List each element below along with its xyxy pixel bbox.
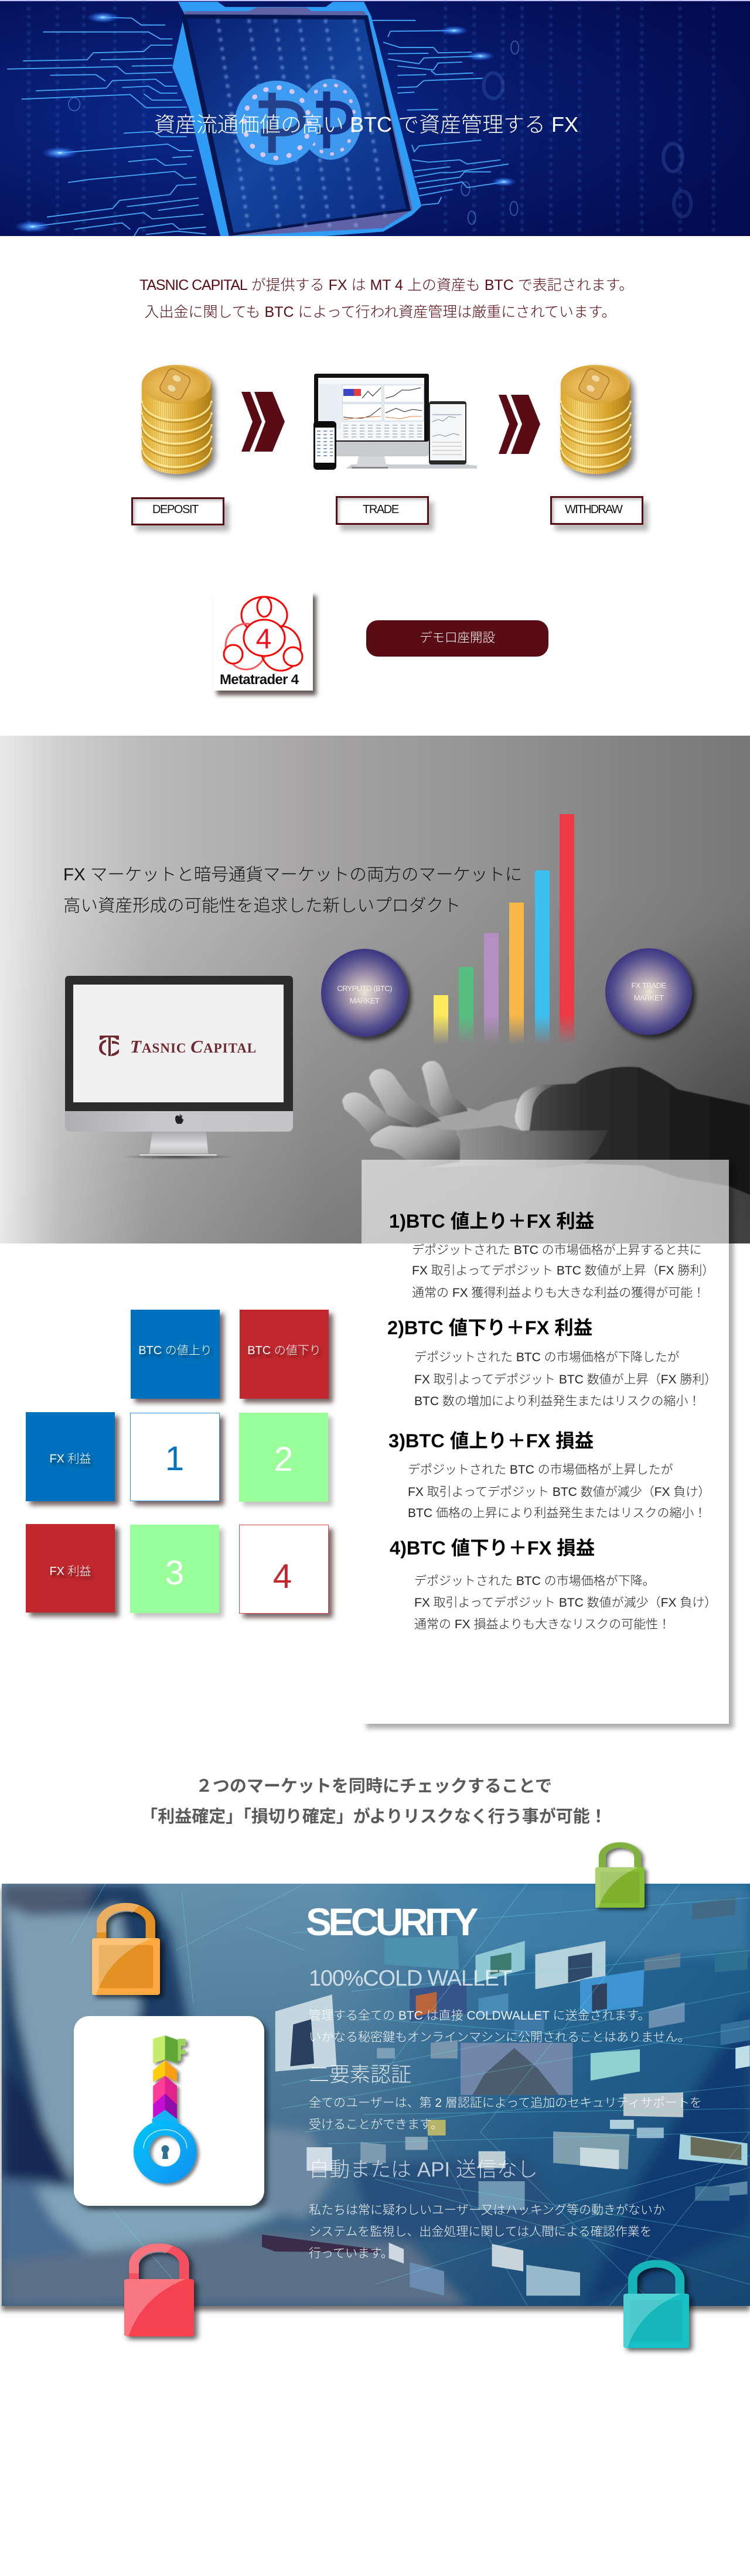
illustration: desktop monitor with logo <box>65 976 293 1160</box>
scenario 1 text: 通常の FX 獲得利益よりも大きな利益の獲得が可能！ <box>412 1286 705 1300</box>
no automatic send text <box>309 2203 665 2260</box>
scenario 3 text <box>408 1463 710 1520</box>
no automatic send text: システムを監視し、出金処理に関しては人間による確認作業を <box>309 2225 652 2239</box>
header text: FX 利益 <box>49 1565 91 1578</box>
cold wallet text: いかなる秘密鍵もオンラインマシンに公開されることはありません。 <box>309 2031 690 2044</box>
two-factor text: 受けることができます。 <box>309 2118 443 2131</box>
icon: teal padlock <box>623 2264 689 2348</box>
matrix: FX profit row header <box>26 1412 115 1501</box>
icon: FX trade market circle <box>605 948 692 1035</box>
matrix: BTC up header <box>131 1310 220 1399</box>
arrow: right double chevron <box>499 395 540 454</box>
section heading: 「利益確定」「損切り確定」がよりリスクなく行う事が可能！ <box>141 1808 607 1826</box>
number 1: 1 <box>165 1440 184 1478</box>
panel: security background <box>2 1884 750 2306</box>
number 2: 2 <box>274 1440 293 1478</box>
scenario 4 text <box>414 1574 717 1631</box>
scenario 3 text: BTC 価格の上昇により利益発生またはリスクの縮小！ <box>408 1506 706 1520</box>
header text: BTC の値下り <box>247 1344 321 1357</box>
icon: back bitcoin coin <box>299 78 362 160</box>
decorative locks layer <box>91 1842 696 2355</box>
hero banner: circuit chip background <box>0 0 750 236</box>
product headline <box>63 865 522 915</box>
scenario 2 text: デポジットされた BTC の市場価格が下降したが <box>414 1351 680 1364</box>
scenario 1 text: FX 取引よってデポジット BTC 数値が上昇（FX 勝利） <box>412 1264 714 1277</box>
scenario 1 text <box>412 1243 714 1300</box>
crypto market label: CRYPUTO (BTC) <box>337 984 392 993</box>
arrow: left double chevron <box>241 392 285 452</box>
matrix cell 1 <box>130 1413 220 1501</box>
intro text block: TASNIC CAPITAL が提供する FX は MT 4 上の資産も BTC で表記されます。 <box>139 277 633 293</box>
no automatic send subheading: 自動または API 送信なし <box>309 2158 538 2181</box>
scenario 2 text <box>414 1351 717 1408</box>
no automatic send text: 行っています。 <box>309 2247 393 2260</box>
icon: green padlock <box>595 1845 645 1908</box>
label: WITHDRAW <box>550 496 643 525</box>
two-factor subheading: 二要素認証 <box>309 2063 411 2086</box>
number 3: 3 <box>165 1554 184 1592</box>
icon: Metatrader logo <box>223 596 304 671</box>
matrix cell 3 <box>130 1525 219 1613</box>
label: TRADE <box>336 496 429 525</box>
crypto market label <box>337 984 392 1005</box>
scenario 1 text: デポジットされた BTC の市場価格が上昇すると共に <box>412 1243 702 1257</box>
matrix cell 4 <box>239 1525 329 1614</box>
FX market label: MARKET <box>634 993 663 1002</box>
product headline: 高い資産形成の可能性を追求した新しいプロダクト <box>63 896 461 915</box>
security title: SECURITY <box>306 1900 475 1943</box>
FX market label <box>631 981 666 1002</box>
scenario 3 heading: 3)BTC 値上り＋FX 損益 <box>388 1430 594 1451</box>
button: demo account <box>366 620 548 657</box>
matrix: BTC down header <box>240 1310 329 1399</box>
flow diagram graphics: coins, chevrons, devices <box>141 364 639 481</box>
scenario 3 text: FX 取引よってデポジット BTC 数値が減少（FX 負け） <box>408 1485 710 1499</box>
FX market label: FX TRADE <box>631 981 666 990</box>
Tasnic Capital wordmark: TASNIC CAPITAL <box>130 1036 257 1057</box>
logo wordmark: Metatrader 4 <box>220 672 298 688</box>
scenario 1 heading: 1)BTC 値上り＋FX 利益 <box>389 1211 594 1232</box>
icon: rainbow key <box>134 2035 202 2187</box>
deposit text: DEPOSIT <box>152 503 198 516</box>
icon: red padlock <box>124 2243 194 2336</box>
icon: withdraw coin stack <box>561 365 630 474</box>
intro text block <box>139 277 633 320</box>
two-factor text <box>309 2096 702 2131</box>
scenario 2 heading: 2)BTC 値下り＋FX 利益 <box>387 1317 592 1338</box>
icon: crypto market circle <box>321 949 408 1037</box>
panel: four outcome scenarios <box>362 1160 729 1724</box>
scenario 3 text: デポジットされた BTC の市場価格が上昇したが <box>408 1463 673 1477</box>
scenario 2 text: BTC 数の増加により利益発生またはリスクの縮小！ <box>414 1395 700 1408</box>
bar chart <box>434 814 574 1043</box>
scenario 2 text: FX 取引よってデポジット BTC 数値が上昇（FX 勝利） <box>414 1373 717 1386</box>
icon: orange padlock <box>92 1903 160 1995</box>
header text: BTC の値上り <box>138 1344 212 1357</box>
withdraw text: WITHDRAW <box>565 503 622 516</box>
header text: FX 利益 <box>49 1453 91 1465</box>
scenario 4 text: FX 取引よってデポジット BTC 数値が減少（FX 負け） <box>414 1596 717 1610</box>
icon: front bitcoin coin <box>235 81 319 165</box>
section heading <box>141 1777 607 1826</box>
panel: key card <box>74 2016 264 2206</box>
no automatic send text: 私たちは常に疑わしいユーザー又はハッキング等の動きがないか <box>309 2203 665 2217</box>
cold wallet text: 管理する全ての BTC は直接 COLDWALLET に送金されます。 <box>309 2009 650 2022</box>
intro text block: 入出金に関しても BTC によって行われ資産管理は厳重にされています。 <box>145 304 616 320</box>
two-factor text: 全てのユーザーは、第 2 層認証によって追加のセキュリティサポートを <box>309 2096 702 2110</box>
hero title: 資産流通価値の高い BTC で資産管理する FX <box>154 112 578 136</box>
matrix: FX loss row header <box>26 1524 115 1612</box>
section heading: ２つのマーケットを同時にチェックすることで <box>196 1777 552 1796</box>
product headline: FX マーケットと暗号通貨マーケットの両方のマーケットに <box>63 865 522 884</box>
icon: trading devices <box>313 374 477 470</box>
trade text: TRADE <box>363 503 398 516</box>
matrix cell 2 <box>239 1413 328 1502</box>
scenario 4 text: デポジットされた BTC の市場価格が下降。 <box>414 1574 655 1588</box>
crypto market label: MARKET <box>350 996 379 1005</box>
cold wallet subheading: 100%COLD WALLET <box>309 1966 512 1991</box>
icon: Metatrader logo: 4 <box>256 624 271 655</box>
hand illustration <box>342 1060 750 1195</box>
label: DEPOSIT <box>131 497 224 525</box>
scenario 4 heading: 4)BTC 値下り＋FX 損益 <box>390 1538 595 1559</box>
icon: deposit coin stack <box>142 365 212 474</box>
panel: Metatrader 4 logo card <box>213 591 313 691</box>
panel: gray product section background <box>0 736 750 1243</box>
button: demo account: デモ口座開設 <box>420 631 495 645</box>
Tasnic Capital logo mark <box>99 1036 119 1056</box>
cold wallet text <box>309 2009 690 2044</box>
scenario 4 text: 通常の FX 損益よりも大きなリスクの可能性！ <box>414 1618 670 1631</box>
number 4: 4 <box>273 1557 292 1596</box>
